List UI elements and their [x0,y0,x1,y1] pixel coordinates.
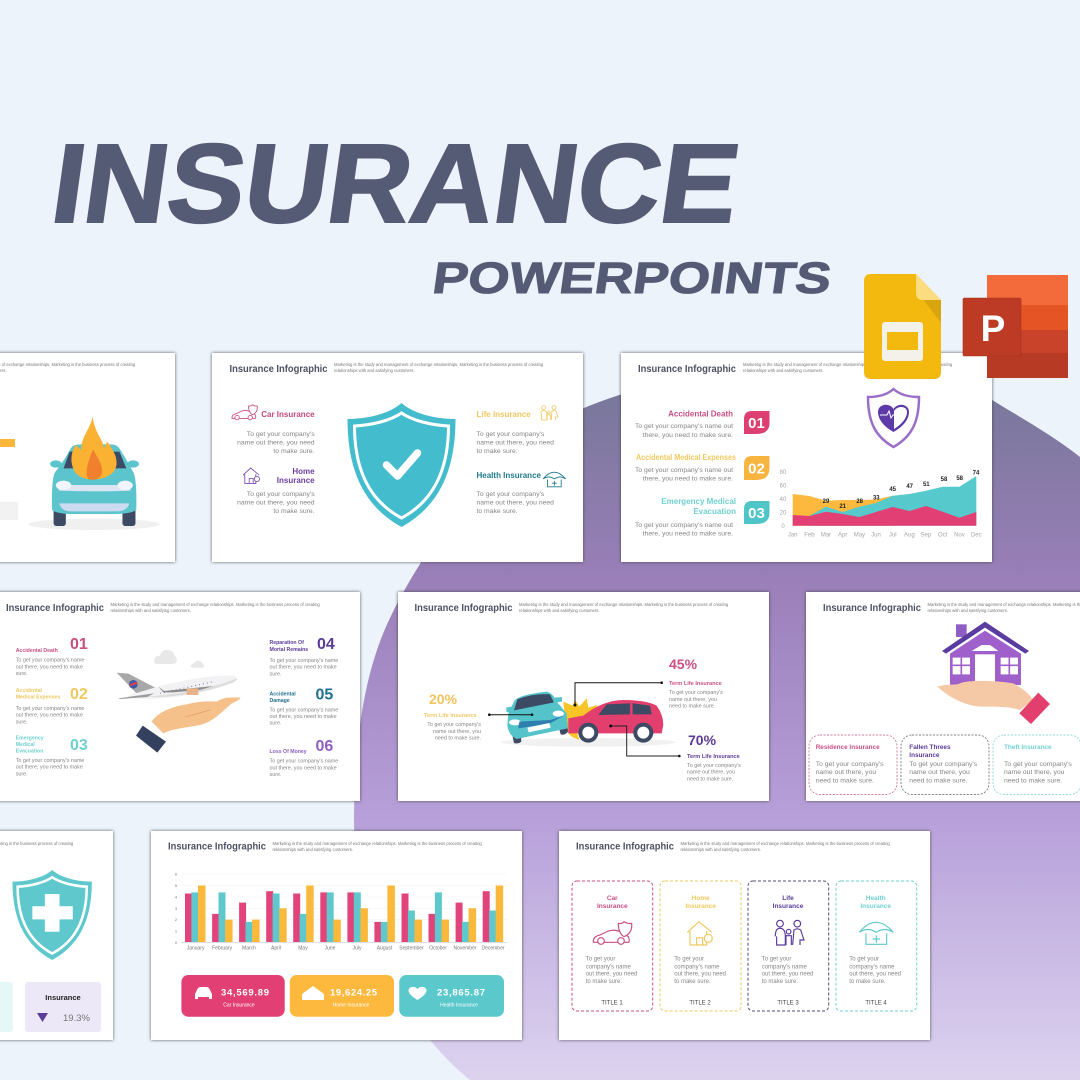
card: fallen threes: To get your company's [909,761,978,768]
area chart: Aug [904,533,915,539]
home insurance text: name out there, you need [237,500,315,506]
item 01 text [635,410,733,439]
stat box: left [0,982,13,1032]
icon: car [232,405,257,420]
card: home insurance: out there, you need [674,972,726,978]
stat box: insurance [25,982,101,1032]
item 03 text: Evacuation [693,507,736,516]
slide heading: Insurance Infographic [576,840,674,852]
area chart: Dec [971,533,982,539]
item 02 text [635,453,736,482]
item 01 text: there, you need to make sure. [643,432,733,439]
connector: 70% [609,724,681,757]
stat: 20%: Term Life Insurance [424,713,477,719]
item 01: 01 [70,636,88,653]
slide: bar chart [151,831,522,1040]
item 02: out there, you need to make [16,713,83,719]
stat: 70%: 70% [688,732,717,748]
stat: 70%: Term Life Insurance [687,754,740,760]
life insurance text: to make sure. [476,448,518,455]
description: relationships with and satisfying customers. [928,608,1008,613]
slide: car crash [398,592,769,801]
illustration: plane over hand [117,650,241,753]
area chart: 40 [780,497,787,503]
bar chart: 0 [175,940,178,945]
bar chart: 3 [175,906,178,911]
item 04: sure. [270,672,281,678]
stat: 45%: 45% [669,656,698,672]
card: life insurance: company's name [762,964,808,970]
card: residence: Residence Insurance [816,744,880,751]
card: residence: name out there, you [816,769,876,776]
item 02 text: To get your company's name out [635,467,733,474]
connector: 45% [574,681,663,706]
badge 01 [744,411,770,434]
item 03 text: there, you need to make sure. [643,530,733,538]
slide: burning car [0,353,175,562]
card: home insurance: To get your [674,957,704,963]
item 05: 05 [316,687,333,704]
slide: plane and hand [0,592,360,801]
item 01: out there, you need to make [16,664,83,670]
card: home insurance [660,881,741,1011]
stat: 45%: To get your company's [669,690,723,696]
area chart: 60 [780,484,787,490]
icon: shield with check [348,403,456,527]
bar chart: August [377,946,393,952]
area chart: Feb [804,533,815,539]
item 03: To get your company's name [16,758,84,764]
health insurance text: To get your company's [476,491,545,498]
card: car insurance: Car [607,895,618,902]
bar chart: December [481,946,505,952]
card: life insurance [748,881,829,1011]
area chart: Mar [821,533,831,539]
item 03 [16,736,88,778]
subtitle: POWERPOINTS [430,254,834,303]
card: home insurance: to make sure. [674,979,711,985]
life insurance text: To get your company's [476,431,545,438]
item 01 [16,636,88,677]
area chart: Jul [889,533,897,539]
bar chart: May [298,946,308,952]
area chart: 28 [856,499,864,505]
card: car insurance: Insurance [597,903,628,910]
item 05: out there, you need to make [270,714,337,720]
icon: Google Slides [864,274,941,379]
item 03: Medical [16,742,35,748]
badge 03: 03 [748,505,765,522]
icon: PowerPoint: P [981,308,1005,349]
slide heading: Insurance Infographic [823,602,921,614]
slide heading: Insurance Infographic [638,363,736,375]
bar chart: November [453,946,477,952]
item 03 text [635,497,736,538]
card: fallen threes: Fallen Threes [909,744,951,751]
stat: 20% [424,691,481,742]
area chart: Jun [871,533,881,539]
item 03: out there, you need to make [16,765,83,771]
card: home insurance: TITLE 2 [689,1000,711,1006]
stat: 45%: name out there, you [669,697,717,703]
stat card: home [290,975,394,1017]
card: health insurance: TITLE 4 [865,1000,887,1006]
badge 03 [744,501,770,524]
stat box: insurance: 19.3% [63,1013,90,1024]
card: life insurance: TITLE 3 [777,1000,799,1006]
area chart: Jan [788,533,798,539]
item 04 [270,636,338,678]
area chart: 47 [906,484,914,490]
card: residence: need to make sure. [816,777,874,784]
badge 02: 02 [748,460,765,478]
health insurance heading: Health Insurance [476,471,542,480]
bar chart: September [399,946,424,952]
bar chart: 2 [175,917,178,922]
description: relationships with and satisfying customers. [110,608,191,613]
card: fallen threes: Insurance [909,752,940,759]
home insurance heading: Insurance [277,476,315,485]
area chart: 80 [780,470,787,476]
card: life insurance: Life [782,895,794,902]
item 03 text: To get your company's name out [635,522,733,529]
slide heading: Insurance Infographic [230,363,328,375]
bar chart: 4 [175,894,178,900]
bar chart: 6 [175,872,178,876]
icon: umbrella [543,472,566,487]
card: car insurance [572,881,653,1011]
icon: family [541,406,558,420]
stat card: car: Car Insurance [223,1002,255,1008]
item 05: To get your company's name [270,707,338,713]
item 02 text: there, you need to make sure. [643,476,733,482]
stat box: insurance: Insurance [45,993,81,1002]
item 01 text: Accidental Death [668,410,733,418]
card: car insurance: out there, you need [586,972,637,978]
item 02 text: Accidental Medical Expenses [636,453,736,462]
home insurance text: to make sure. [273,508,315,515]
area chart: 58 [956,476,964,482]
illustration: house on hand [937,622,1050,724]
description: relationships with and satisfying customers. [334,368,415,373]
stat card: health: Health Insurance [440,1002,478,1008]
car insurance text: name out there, you need [237,440,315,446]
card: home insurance: Insurance [685,903,716,910]
bar chart: 5 [175,883,178,888]
item 03: 03 [70,737,88,754]
area chart: 74 [973,470,980,476]
description: Marketing is the study and management of exchange relationships. Marketing is the business process of creating [743,362,953,367]
card: health insurance: To get your [849,957,879,963]
item 04: out there, you need to make [270,665,337,671]
card: residence [809,735,897,794]
item 03 text: Emergency Medical [661,497,736,506]
item 01: Accidental Death [16,648,58,654]
stat card: car [181,975,285,1017]
card: life insurance: To get your [762,957,791,963]
stat: 20%: name out there, you [433,729,481,735]
stat: 20%: 20% [429,691,458,707]
area chart: Apr [838,533,847,539]
description: relationships with and satisfying customers. [519,608,600,613]
icon: purple shield with heart [868,389,919,447]
stat card: home: Home Insurance [333,1002,370,1008]
yellow bar [0,439,15,447]
card: health insurance: to make sure. [849,979,886,985]
area chart: Sep [921,533,932,539]
title: INSURANCE [45,120,747,246]
card: home insurance: company's name [674,964,720,970]
item 01 text: To get your company's name out [635,423,733,430]
item 03: Emergency [16,736,44,742]
item 06: sure. [270,772,281,778]
badge 01: 01 [748,415,765,432]
area chart: 51 [923,482,930,488]
item 04: 04 [317,636,335,653]
item 02: Accidental [16,688,42,694]
card: health insurance: Health [866,895,886,902]
icon: shield with cross [12,870,92,960]
illustration: car crash [501,692,676,747]
slide: area chart [621,353,992,562]
description: Marketing is the study and management of exchange relationships. Marketing is the business process of creating [334,362,544,367]
item 04: To get your company's name [270,658,338,664]
card: theft: name out there, you [1004,769,1065,776]
item 06: Loss Of Money [270,749,307,755]
slide heading: Insurance Infographic [6,602,104,614]
item 02: 02 [70,686,88,703]
card: fallen threes [901,735,989,794]
area chart: Oct [938,533,948,539]
card: fallen threes: need to make sure. [909,777,968,784]
stat: 45% [669,656,723,710]
car insurance heading: Car Insurance [261,410,315,419]
card: theft [993,735,1080,794]
card: fallen threes: name out there, you [909,769,970,776]
stat card: health [399,975,504,1017]
slide: four insurance cards [559,831,930,1040]
item 02 [16,686,88,726]
slide: insurance types with shield [212,353,583,562]
card: life insurance: out there, you need [762,972,813,978]
stat: 45%: need to make sure. [669,704,715,710]
card: health insurance: company's name [849,964,895,970]
stat card: car: 34,569.89 [221,988,269,999]
card: theft: need to make sure. [1004,777,1062,784]
bar chart: 1 [175,928,178,934]
car insurance text: to make sure. [273,448,315,455]
life insurance heading: Life Insurance [476,410,531,419]
stat: 70%: name out there, you [687,770,735,776]
life insurance text: name out there, you need [476,440,554,446]
description: Marketing is the study and management of exchange relationships. Marketing is the business process of creating [680,841,890,846]
description: relationships with and satisfying customers. [743,368,824,373]
area chart: 29 [823,499,830,505]
bar chart: January [187,946,205,952]
card: life insurance: Insurance [773,903,804,910]
bar chart: March [242,946,256,952]
area chart: 0 [781,524,785,530]
item 03: Evacuation [16,748,43,754]
item 02: sure. [16,720,28,726]
item 04: Reparation Of [270,640,304,646]
bar chart: April [271,946,281,952]
badge 02 [744,456,770,480]
stat: 45%: Term Life Insurance [669,681,722,687]
slide heading: Insurance Infographic [168,840,266,852]
item 05: Damage [270,698,290,704]
area chart: 20 [780,510,787,516]
bar chart: February [212,946,233,952]
home insurance text: To get your company's [247,491,315,498]
card: life insurance: to make sure. [762,979,798,985]
home insurance heading: Home [292,467,315,476]
slide: health shield [0,831,113,1040]
card: car insurance: to make sure. [586,979,622,985]
area chart: 58 [941,477,948,483]
card: theft: Theft Insurance [1004,744,1052,751]
bar chart: October [429,946,447,952]
car insurance text: To get your company's [247,431,315,438]
card: residence: To get your company's [816,761,884,768]
area chart: 21 [839,504,847,510]
card: home insurance: Home [692,895,710,902]
stat: 70%: To get your company's [687,763,741,769]
item 03: sure. [16,772,28,778]
purple blob [354,365,1080,1080]
card: car insurance: To get your [586,957,615,963]
bar chart [175,872,507,952]
area chart [780,470,982,539]
item 06: 06 [316,738,333,755]
card: car insurance: TITLE 1 [601,1000,623,1006]
stat: 20%: To get your company's [427,722,481,728]
item 06: To get your company's name [270,759,338,765]
area chart: 45 [889,487,897,493]
item 05 [270,687,338,727]
item 06: out there, you need to make [270,765,337,771]
area chart: 33 [873,496,880,502]
card: car insurance: company's name [586,964,632,970]
description: relationships with and satisfying customers. [272,847,353,852]
item 05: Accidental [270,692,296,698]
item 01: To get your company's name [16,658,84,664]
stat card: health: 23,865.87 [437,988,485,999]
stat card: home: 19,624.25 [330,988,378,999]
grey stat box [0,502,18,520]
connector: 20% [488,713,533,716]
icon: home [243,468,260,483]
item 04: Mortal Remains [270,647,308,653]
stat: 70%: need to make sure. [687,776,733,782]
bar chart: July [353,946,362,952]
health insurance text: to make sure. [476,508,518,515]
area chart: Nov [954,533,965,539]
card: theft: To get your company's [1004,761,1072,768]
stat: 20%: need to make sure. [435,736,481,742]
card: health insurance: out there, you need [849,972,901,978]
item 05: sure. [270,721,281,727]
stat: 70% [687,732,741,782]
description: relationships with and satisfying customers. [680,847,761,852]
card: health insurance: Insurance [860,903,891,910]
item 06 [270,738,338,778]
item 02: To get your company's name [16,706,84,712]
item 02: Medical Expenses [16,694,61,700]
icon: PowerPoint [963,275,1068,378]
slide: house in hand [806,592,1080,801]
description: Marketing is the study and management of exchange relationships. Marketing is the business process of creating [110,602,320,607]
health insurance text: name out there, you need [476,500,554,506]
area chart: May [854,533,865,539]
card: health insurance [836,881,917,1011]
description: Marketing is the study and management of exchange relationships. Marketing is the business process of creating [519,602,729,607]
bar chart: June [325,946,336,952]
icon: burning car [28,417,160,530]
item 01: sure. [16,671,28,677]
description: Marketing is the study and management of exchange relationships. Marketing is the business process of creating [272,841,482,846]
slide heading: Insurance Infographic [414,602,513,614]
